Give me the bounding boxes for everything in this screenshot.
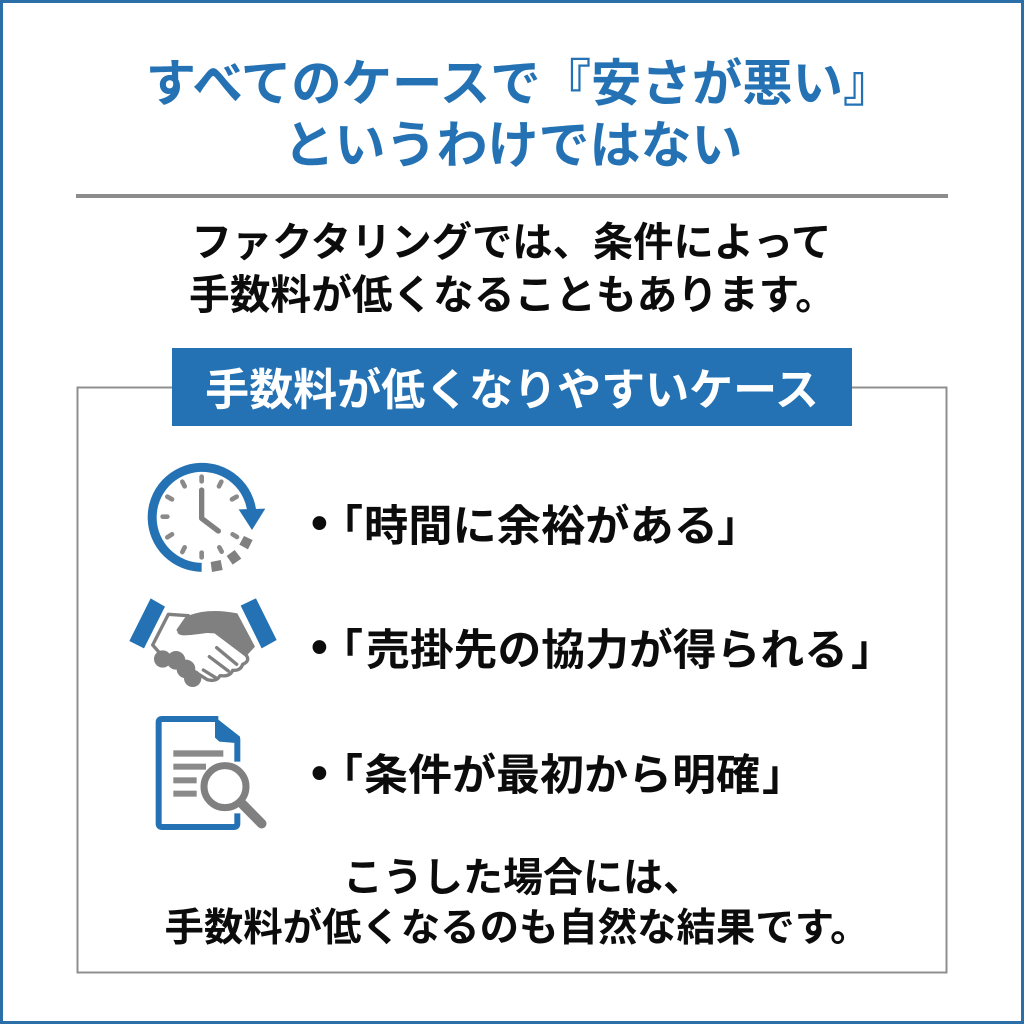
text: case 3: •: [311, 747, 328, 800]
text: case 2: 「: [320, 627, 363, 675]
text: case 3: 「: [320, 752, 363, 800]
text: case 1: [311, 497, 760, 551]
closing text: こうした場合には、: [343, 856, 703, 900]
panel heading: cases banner: 手数料が低くなりやすいケース: [205, 366, 819, 415]
closing text: [164, 856, 870, 950]
title: [146, 55, 893, 174]
icon: clock: [152, 467, 265, 572]
text: case 2: •: [311, 621, 328, 674]
icon: document with magnifier: [159, 717, 262, 827]
text: case 1: 「: [320, 503, 363, 551]
closing text: 手数料が低くなるのも自然な結果です。: [164, 906, 870, 950]
text: case 1: 」: [717, 503, 760, 551]
intro text: 手数料が低くなることもあります。: [189, 272, 836, 318]
title: というわけではない: [283, 117, 743, 174]
panel heading: cases banner: [172, 348, 852, 426]
title: すべてのケースで『安さが悪い』: [146, 55, 893, 112]
intro text: ファクタリングでは、条件によって: [192, 220, 831, 265]
icon: handshake: [129, 598, 277, 687]
text: case 2: 売掛先の協力が得られる: [366, 627, 848, 675]
panel: cases frame: [78, 388, 946, 972]
text: case 1: •: [311, 497, 328, 550]
text: case 1: 時間に余裕がある: [364, 503, 718, 551]
intro text: [189, 220, 836, 318]
text: case 2: 」: [851, 627, 894, 675]
text: case 3: 条件が最初から明確: [364, 752, 760, 800]
text: case 3: 」: [762, 752, 805, 800]
